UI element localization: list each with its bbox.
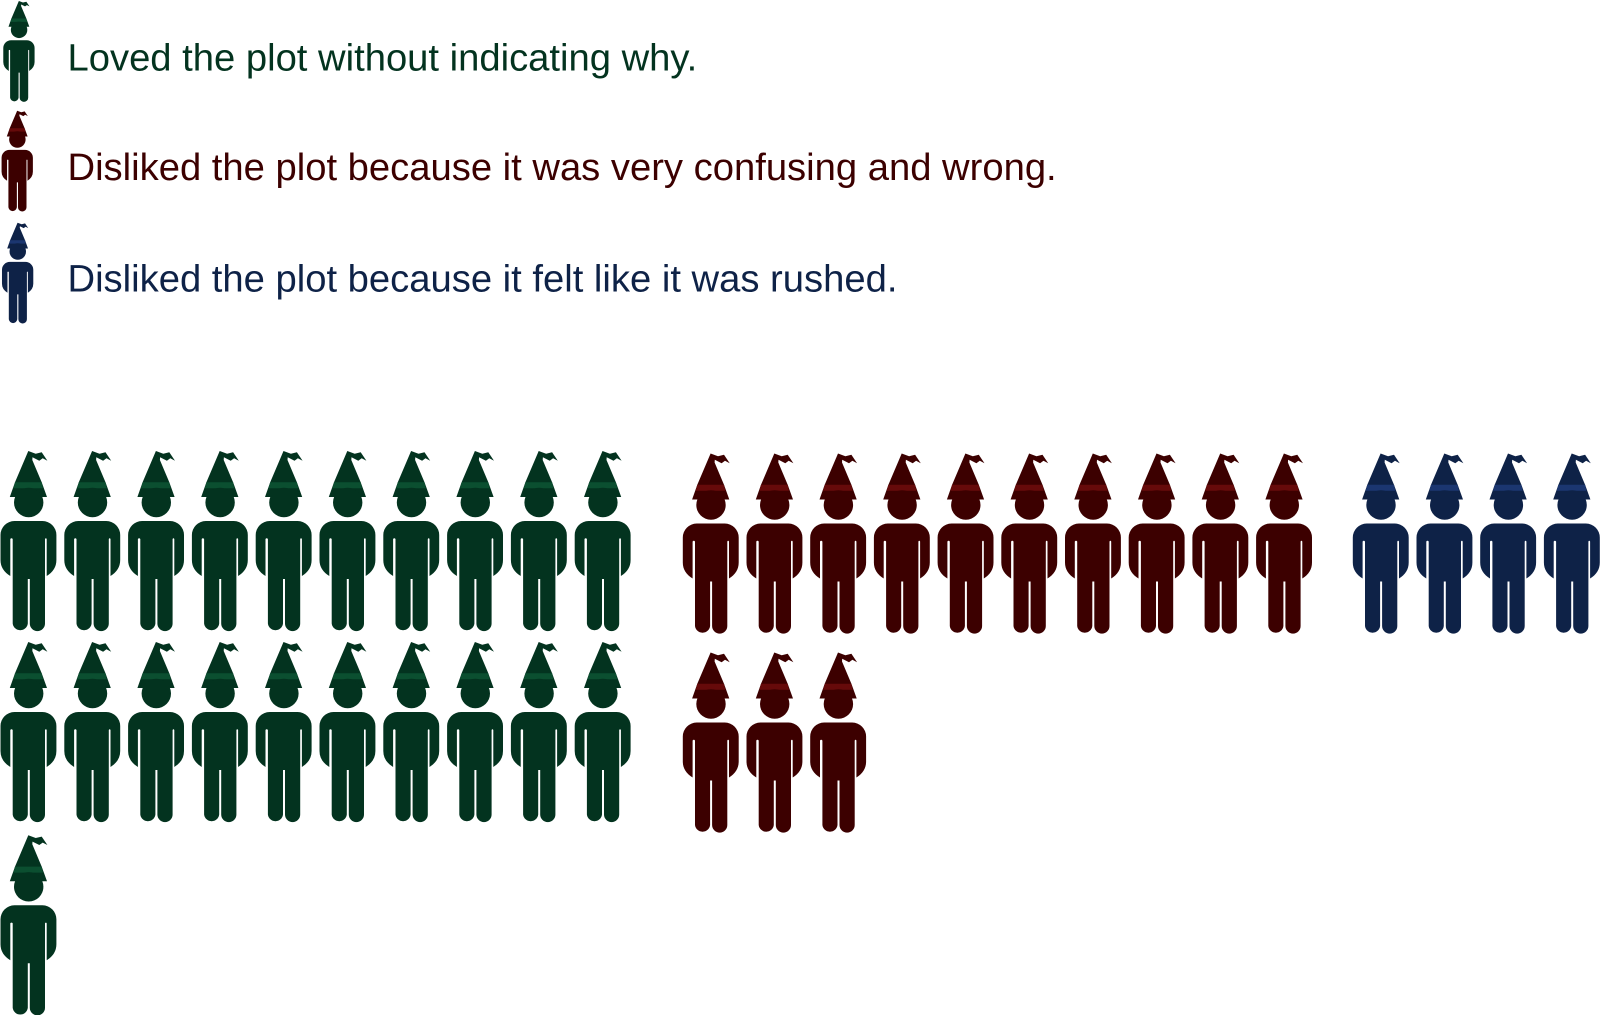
- person row 1 column 4: [192, 451, 248, 631]
- person row 1 column 6: [1001, 454, 1057, 634]
- legend item: disliked, confusing: [2, 111, 1057, 212]
- person row 2 column 8: [447, 642, 503, 822]
- pictogram: red group, 13 people: [683, 454, 1312, 833]
- person row 2 column 2: [64, 642, 120, 822]
- person row 2 column 5: [256, 642, 312, 822]
- person row 1 column 1: [0, 451, 56, 631]
- person row 2 column 2: [746, 652, 802, 833]
- person row 1 column 2: [1416, 454, 1472, 634]
- legend item: loved the plot: [3, 1, 697, 102]
- person row 1 column 6: [320, 451, 375, 631]
- legend label: rushed: Disliked the plot because it felt like it was rushed.: [68, 258, 897, 300]
- legend item: disliked, rushed: [2, 223, 897, 324]
- person row 2 column 1: [0, 642, 56, 822]
- icon: green person: [3, 1, 35, 102]
- person row 1 column 4: [874, 454, 930, 634]
- person row 1 column 3: [128, 451, 184, 631]
- person row 1 column 1: [1353, 454, 1409, 634]
- person row 2 column 4: [192, 642, 248, 822]
- person row 1 column 10: [575, 451, 631, 631]
- legend label: confusing: Disliked the plot because it was very confusing and wrong.: [68, 146, 1057, 189]
- person row 2 column 3: [128, 642, 184, 822]
- person row 1 column 9: [1192, 454, 1248, 634]
- person row 1 column 7: [383, 451, 439, 631]
- legend: [2, 1, 1057, 324]
- person row 3 column 1: [0, 835, 56, 1015]
- person row 1 column 3: [810, 454, 866, 634]
- person row 1 column 3: [1480, 454, 1536, 634]
- person row 2 column 3: [810, 652, 866, 833]
- pictogram: blue group, 4 people: [1353, 454, 1600, 634]
- person row 2 column 7: [383, 642, 439, 822]
- icon: red person: [2, 111, 33, 212]
- person row 2 column 9: [511, 642, 567, 822]
- pictogram: green group, 21 people: [0, 451, 631, 1015]
- person row 2 column 6: [320, 642, 375, 822]
- person row 2 column 10: [575, 642, 631, 822]
- person row 1 column 7: [1065, 454, 1121, 634]
- person row 1 column 5: [938, 454, 994, 634]
- person row 1 column 2: [64, 451, 120, 631]
- person row 1 column 4: [1544, 454, 1600, 634]
- person row 2 column 1: [683, 652, 739, 833]
- person row 1 column 8: [447, 451, 503, 631]
- person row 1 column 8: [1129, 454, 1185, 634]
- legend label: loved: Loved the plot without indicating why.: [68, 36, 697, 80]
- person row 1 column 2: [746, 454, 802, 634]
- person row 1 column 9: [511, 451, 567, 631]
- person row 1 column 1: [683, 454, 739, 634]
- person row 1 column 10: [1256, 454, 1312, 634]
- person row 1 column 5: [256, 451, 312, 631]
- icon: blue person: [2, 223, 33, 324]
